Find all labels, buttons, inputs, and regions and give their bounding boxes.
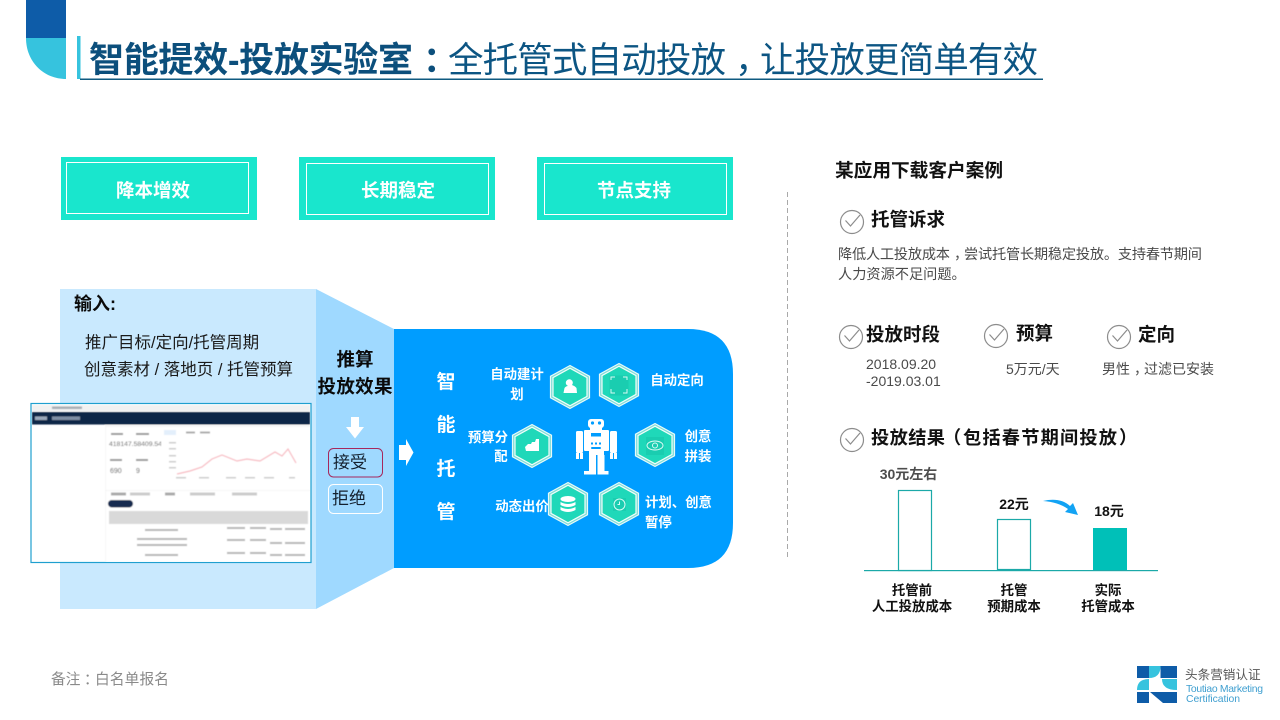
title: 智能提效-投放实验室 [89, 41, 413, 80]
vertical heading [436, 371, 456, 523]
icon: robot [576, 419, 617, 474]
title: ， [735, 40, 771, 80]
section: delivery period [840, 324, 941, 389]
section: delivery period: -2019.03.01 [866, 373, 941, 389]
bar: expected cost: 预期成本 [987, 598, 1041, 614]
benefit card: 长期稳定 [299, 157, 495, 220]
benefit card: 降本增效: 降本增效 [116, 180, 190, 201]
heading: estimate effect: 推算 [336, 349, 374, 370]
feature: plan and creative pause [600, 482, 712, 530]
section: budget: 预算 [1016, 323, 1053, 344]
panel: intelligent hosting [394, 329, 733, 568]
section: targeting: 男性 [1102, 361, 1130, 377]
title [77, 36, 1043, 80]
option: reject [328, 484, 382, 514]
logo text: Toutiao Marketing [1186, 684, 1263, 695]
feature: auto build plan [490, 366, 590, 408]
feature: creative assembly: 拼装 [685, 448, 712, 464]
feature: creative assembly [636, 424, 712, 466]
logo mark [1137, 666, 1177, 703]
heading: input: 输入: [74, 293, 116, 314]
screenshot: delivery dashboard: 418147.58409.54 [109, 441, 162, 448]
panel: estimation funnel: 投放效果 [318, 376, 393, 397]
section: hosting request: 人力资源不足问题。 [838, 267, 966, 283]
benefit card: 节点支持: 节点支持 [597, 180, 671, 201]
benefit card: 长期稳定: 长期稳定 [361, 180, 435, 201]
section: targeting: ， [1134, 361, 1148, 377]
title: 全托管式自动投放 [448, 40, 726, 80]
feature: budget allocation: 预算分 [468, 429, 509, 445]
title: 让投放更简单有效 [760, 40, 1038, 80]
section: targeting: 定向 [1138, 324, 1175, 345]
bar: expected cost: 托管 [1001, 582, 1027, 598]
section: budget: 5万元/天 [1006, 361, 1060, 377]
divider [786, 192, 788, 560]
input list: 推广目标/定向/托管周期 [85, 333, 259, 352]
section: delivery result: ） [1119, 428, 1137, 448]
feature: auto build plan: 自动建计 [490, 366, 544, 382]
section: delivery period: 2018.09.20 [866, 356, 936, 372]
screenshot: delivery dashboard: 9 [136, 468, 140, 475]
vertical heading: 能 [436, 414, 456, 436]
logo text: 头条营销认证 [1185, 667, 1261, 682]
section: targeting [1102, 324, 1214, 377]
heading: case study: 某应用下载客户案例 [835, 160, 1003, 181]
section: hosting request: ， [954, 247, 968, 263]
arrow: down [346, 417, 364, 438]
section: delivery result [840, 428, 1137, 452]
footnote [51, 671, 169, 688]
corner decoration [26, 0, 66, 79]
section: targeting: 过滤已安装 [1144, 361, 1214, 377]
footnote: ： [84, 672, 99, 688]
section: delivery period: 投放时段 [866, 324, 940, 345]
bar: actual cost: 实际 [1095, 582, 1122, 598]
input list [84, 333, 293, 379]
feature: auto targeting: 自动定向 [650, 372, 704, 388]
section: delivery result: （ [943, 428, 961, 448]
panel: estimation funnel [316, 289, 394, 609]
section: hosting request: 降低人工投放成本 [838, 247, 950, 263]
section: delivery result: 包括春节期间投放 [963, 428, 1117, 448]
bar: expected cost [987, 496, 1041, 614]
logo text: Certification [1186, 694, 1240, 705]
screenshot: delivery dashboard [31, 404, 311, 562]
bar: actual cost: 18元 [1094, 503, 1124, 519]
bar: actual cost: 托管成本 [1081, 598, 1135, 614]
bar: before hosting [872, 466, 953, 614]
bar: before hosting: 托管前 [892, 582, 932, 598]
feature: auto build plan: 划 [510, 386, 524, 402]
vertical heading: 托 [436, 458, 456, 480]
section: hosting request: 托管诉求 [871, 209, 946, 230]
section: hosting request: 尝试托管长期稳定投放。支持春节期间 [964, 247, 1202, 263]
footnote: 白名单报名 [95, 671, 169, 688]
feature: creative assembly: 创意 [685, 428, 711, 444]
bar chart: cost comparison [864, 466, 1158, 614]
bar: actual cost [1081, 503, 1135, 614]
screenshot: delivery dashboard: 690 [110, 468, 122, 475]
bar: before hosting: 30元左右 [880, 466, 937, 482]
feature: plan and creative pause: 暂停 [645, 514, 672, 530]
panel: input [60, 289, 316, 609]
feature: plan and creative pause: 计划、创意 [645, 494, 712, 510]
feature: dynamic bidding: 动态出价 [495, 498, 549, 514]
title: ： [423, 41, 458, 80]
logo [1137, 666, 1263, 705]
vertical heading: 管 [436, 500, 456, 523]
feature: dynamic bidding [495, 482, 588, 526]
benefit card: 降本增效 [61, 157, 257, 220]
input list: 创意素材 / 落地页 / 托管预算 [84, 360, 293, 379]
benefit card: 节点支持 [537, 157, 733, 220]
feature: budget allocation [468, 424, 552, 468]
option: accept [328, 448, 382, 477]
vertical heading: 智 [436, 371, 456, 393]
feature: budget allocation: 配 [494, 449, 508, 464]
section: hosting request [838, 209, 1202, 283]
logo text [1185, 667, 1263, 705]
bar: expected cost: 22元 [999, 496, 1029, 512]
option: reject: 拒绝 [332, 489, 366, 508]
arrow: decrease [1043, 500, 1078, 515]
option: accept: 接受 [333, 453, 367, 472]
footnote: 备注 [51, 671, 81, 688]
feature: auto targeting [600, 364, 704, 406]
section: delivery result: 投放结果 [871, 428, 945, 448]
section: budget [984, 323, 1060, 377]
arrow: right [399, 439, 414, 466]
bar: before hosting: 人工投放成本 [872, 598, 953, 614]
